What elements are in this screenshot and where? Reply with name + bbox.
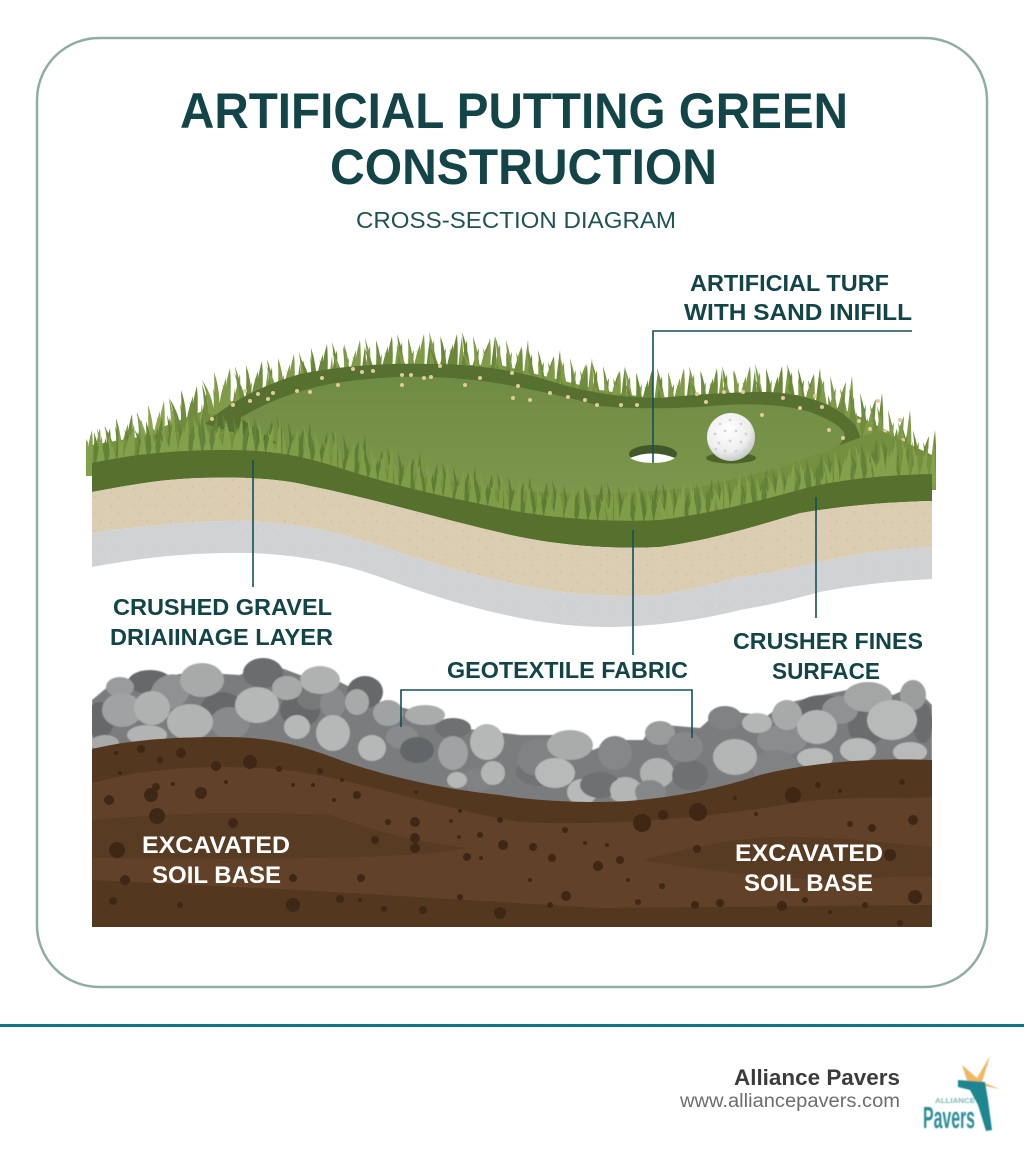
leader: geotextile centre — [632, 530, 634, 655]
layer: gray gravel band — [92, 521, 932, 627]
label: excavated soil base right: EXCAVATED — [735, 840, 883, 867]
label: crusher fines surface: CRUSHER FINES — [733, 628, 923, 654]
leader: artificial turf — [653, 331, 912, 463]
infill sand specks — [210, 364, 905, 445]
label: geotextile fabric: GEOTEXTILE FABRIC — [447, 657, 688, 683]
footer brand name: Alliance Pavers — [734, 1065, 900, 1090]
stones dark — [86, 658, 933, 786]
label: excavated soil base left: SOIL BASE — [152, 862, 281, 889]
stones light — [91, 663, 927, 805]
back grass mass — [146, 365, 895, 490]
soil strata — [92, 767, 932, 908]
panel: diagram frame — [37, 38, 987, 987]
icon: Alliance Pavers logo: ALLIANCE — [935, 1098, 975, 1105]
icon: Alliance Pavers logo: Pavers — [923, 1100, 975, 1135]
label: crushed gravel drainage layer: CRUSHED GRAVEL — [113, 594, 332, 620]
icon: Alliance Pavers logo — [923, 1056, 1000, 1135]
soil pebbles — [104, 745, 922, 926]
layer: gravel stones — [92, 657, 932, 802]
label: crushed gravel drainage layer — [110, 594, 333, 650]
layer: turf backing band — [92, 450, 932, 548]
label: crusher fines surface: SURFACE — [772, 658, 880, 684]
label: artificial turf with sand infill: ARTIFICIAL TURF — [690, 270, 889, 296]
gravel base mass — [92, 668, 932, 802]
label: excavated soil base left — [142, 832, 290, 889]
back grass blades — [72, 332, 949, 490]
front grass blades — [86, 414, 936, 521]
leader: geotextile bracket — [401, 690, 692, 738]
title: CONSTRUCTION — [330, 139, 717, 195]
leader: crusher fines — [815, 497, 817, 618]
golf ball — [706, 413, 756, 464]
side grass mass — [92, 430, 932, 500]
title: ARTIFICIAL PUTTING GREEN — [180, 83, 848, 139]
label: artificial turf with sand infill — [684, 270, 912, 325]
turf section — [64, 332, 949, 530]
label: artificial turf with sand infill: WITH SAND INIFILL — [684, 299, 912, 325]
putting surface — [240, 376, 845, 480]
label: crusher fines surface — [733, 628, 923, 684]
title — [180, 83, 848, 195]
label: excavated soil base right: SOIL BASE — [744, 870, 873, 897]
leader: crushed gravel — [252, 460, 254, 587]
hole — [629, 445, 677, 463]
layer: excavated soil — [92, 737, 932, 927]
label: excavated soil base right — [735, 840, 883, 897]
footer website: www.alliancepavers.com — [679, 1091, 900, 1112]
stones dark front — [400, 736, 708, 799]
turf edge ring — [206, 364, 860, 446]
layer: crusher fines sand — [92, 478, 932, 596]
label: excavated soil base left: EXCAVATED — [142, 832, 290, 859]
stones mid — [102, 674, 926, 776]
footer rule — [0, 1024, 1024, 1027]
label: crushed gravel drainage layer: DRIAIINAGE LAYER — [110, 624, 333, 650]
subtitle: CROSS-SECTION DIAGRAM — [356, 207, 676, 233]
